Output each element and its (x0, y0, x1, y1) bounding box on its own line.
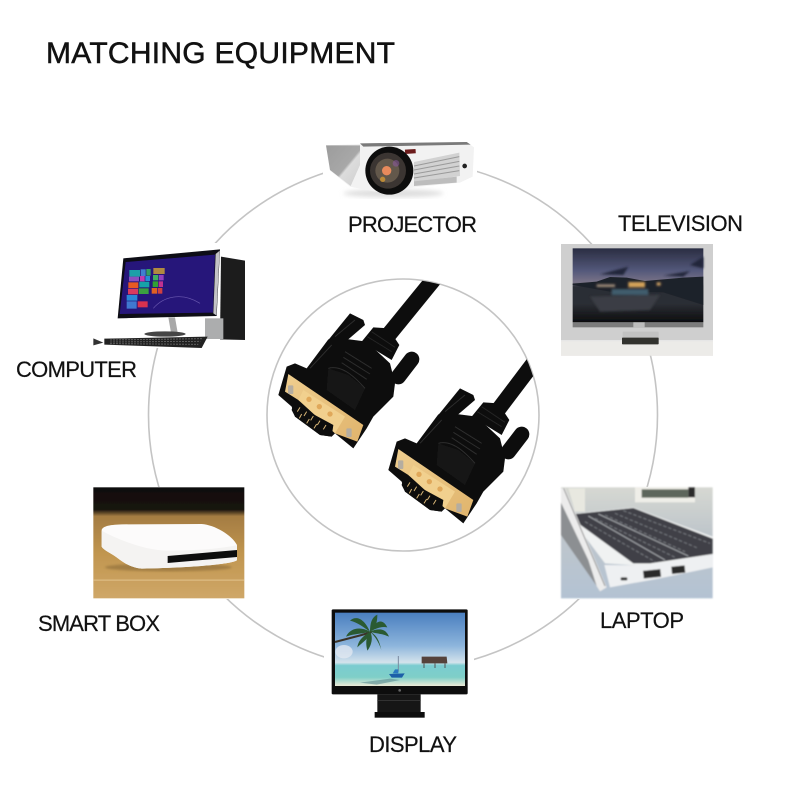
panel: laptop (561, 487, 713, 599)
photo: projector (326, 142, 474, 197)
panel: projector (323, 130, 477, 242)
panel: television (561, 208, 748, 356)
label: television: TELEVISION (618, 211, 743, 236)
panel: computer (10, 243, 250, 385)
label: computer: COMPUTER (16, 357, 137, 382)
label: laptop: LAPTOP (600, 608, 684, 633)
photo: television (561, 244, 713, 356)
inner circle with VGA cable (267, 272, 543, 551)
photo: display monitor (332, 609, 468, 718)
photo: computer (93, 249, 245, 348)
outer ring connecting devices (148, 160, 658, 670)
connector: upper (278, 313, 412, 448)
panel: smart box (93, 487, 245, 599)
title: MATCHING EQUIPMENT (46, 37, 395, 70)
label: projector: PROJECTOR (348, 212, 477, 237)
photo: VGA cable with two connectors (278, 272, 543, 523)
panel: display (324, 602, 474, 722)
label: display: DISPLAY (369, 732, 457, 757)
connector: lower (388, 388, 522, 523)
photo: smart box (93, 487, 244, 598)
label: smart box: SMART BOX (38, 611, 160, 636)
photo: laptop (561, 487, 713, 598)
